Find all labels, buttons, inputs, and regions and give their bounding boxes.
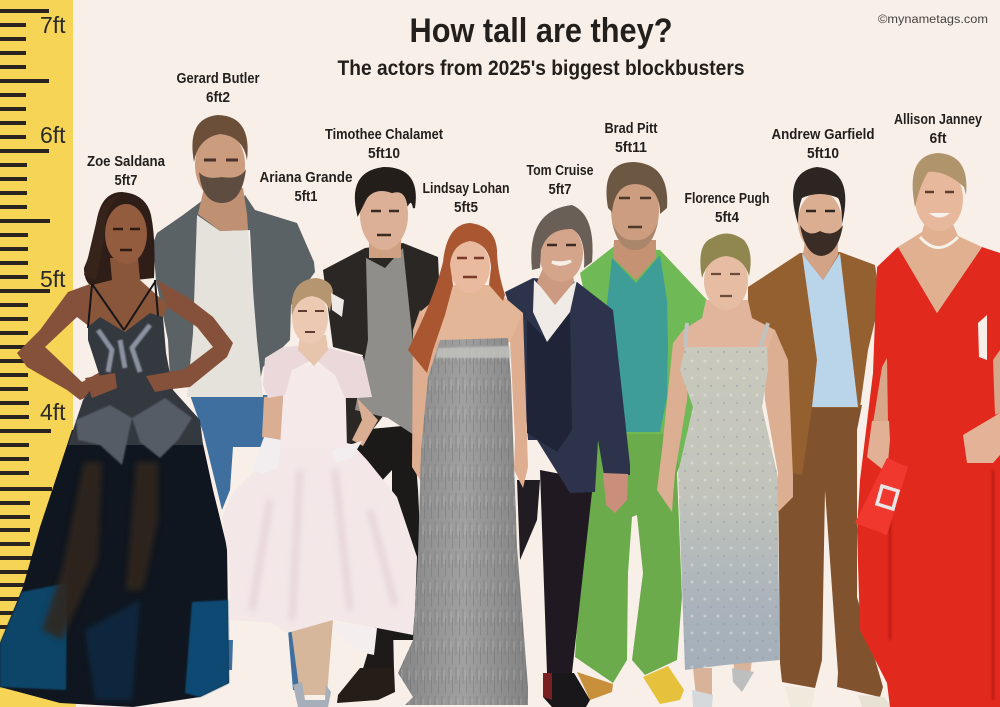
height ruler: 4ft: [40, 399, 66, 425]
brown trousers: [778, 405, 883, 697]
black jacket: [323, 243, 440, 446]
front hair: [84, 196, 120, 280]
arms: [262, 395, 378, 446]
blue hem right: [185, 600, 229, 697]
height ruler: 5ft: [40, 266, 66, 292]
labels: names and heights: 5ft10: [807, 146, 839, 162]
sheer legs: [42, 462, 158, 640]
labels: names and heights: [87, 71, 982, 226]
height ruler: 6ft: [40, 122, 66, 148]
grey shirt: [355, 248, 416, 435]
credit: mynametags.com: ©mynametags.com: [878, 14, 988, 26]
face: [704, 252, 748, 310]
navy jacket: [505, 278, 630, 493]
hands: [85, 372, 176, 398]
gown seams: [890, 470, 993, 700]
right shoe: [732, 668, 754, 692]
hair: [913, 153, 966, 207]
right arm: [145, 280, 233, 390]
legs: [693, 660, 752, 696]
labels: names and heights: Zoe Saldana: [87, 154, 166, 170]
bodice: [68, 313, 203, 445]
bodice: [280, 365, 347, 448]
left arm: [873, 358, 888, 423]
hair: [292, 278, 333, 316]
eyes and smile: [925, 191, 954, 193]
hair bow: [331, 293, 344, 317]
straps: [88, 280, 158, 330]
curly hair: [356, 168, 415, 214]
person: Brad Pitt: [575, 162, 708, 704]
labels: names and heights: 5ft7: [114, 173, 138, 189]
labels: names and heights: Allison Janney: [894, 112, 982, 128]
subtitle: The actors from 2025's biggest blockbusters: [338, 57, 744, 80]
beard: [800, 225, 843, 256]
bodice sequins: [98, 325, 150, 372]
person: Florence Pugh: [657, 233, 793, 707]
hair: [408, 223, 505, 373]
puff sleeves: [263, 346, 372, 398]
left shoe: [785, 686, 815, 707]
neck: [298, 335, 328, 366]
labels: names and heights: 5ft5: [454, 200, 478, 216]
trousers: [540, 470, 592, 673]
eyes and mouth: [711, 274, 740, 296]
blue hem centre: [85, 600, 140, 700]
top band highlight: [436, 346, 511, 358]
labels: names and heights: Andrew Garfield: [772, 127, 874, 143]
labels: names and heights: Gerard Butler: [176, 71, 260, 87]
right shoe: [858, 695, 892, 707]
left hand: [867, 421, 890, 473]
eyes and smile: [547, 244, 576, 246]
blue hem left: [0, 583, 67, 690]
sequin dress: [678, 347, 780, 670]
sequin texture: [678, 347, 780, 670]
decollete: [898, 222, 982, 313]
labels: names and heights: Brad Pitt: [604, 121, 658, 137]
face: [611, 170, 659, 250]
light blue shirt: [802, 253, 858, 407]
face: [360, 180, 408, 250]
labels: names and heights: 5ft7: [548, 182, 572, 198]
t-shirt: [187, 215, 263, 397]
legs: [290, 620, 333, 695]
green blazer: [580, 247, 708, 478]
face: [292, 292, 328, 344]
person: Tom Cruise: [505, 205, 630, 707]
height ruler: [0, 0, 76, 707]
back leg: [517, 480, 540, 560]
waistcoat: [527, 310, 572, 452]
red clutch: [855, 458, 908, 535]
right hand: [963, 413, 1000, 463]
brows and moustache: [371, 211, 399, 235]
labels: names and heights: 6ft2: [206, 90, 230, 106]
red gown: [857, 247, 1000, 707]
jeans below skirt: [226, 630, 300, 690]
stubble: [612, 222, 658, 250]
left arm: [657, 330, 690, 512]
person: Allison Janney: [855, 153, 1000, 707]
person: Lindsay Lohan: [398, 223, 528, 705]
hair: [793, 167, 845, 224]
shoes: [543, 673, 590, 707]
person: Zoe Saldana: [0, 192, 233, 707]
jeans: [190, 395, 283, 510]
red sole: [543, 673, 552, 700]
white shirt: [533, 280, 577, 342]
leather jacket: [153, 195, 315, 390]
skirt embroidery: [76, 398, 192, 465]
hair: [192, 115, 248, 162]
arms: [412, 310, 528, 488]
straps: [685, 323, 768, 347]
necklace: [920, 237, 958, 248]
labels: names and heights: Timothee Chalamet: [325, 127, 443, 143]
teal shirt: [597, 255, 668, 432]
person: Andrew Garfield: [748, 167, 892, 707]
neck: [613, 240, 656, 280]
eyes and mouth: [457, 258, 484, 277]
clutch buckle: [877, 486, 898, 509]
labels: names and heights: Ariana Grande: [260, 170, 352, 186]
labels: names and heights: 6ft: [930, 131, 947, 147]
face: [450, 241, 490, 293]
trousers: [345, 425, 421, 640]
left trainer: [577, 672, 613, 700]
shoulders and chest: [420, 285, 523, 342]
title: How tall are they?: [410, 12, 672, 50]
neck: [537, 268, 574, 305]
left arm: [17, 284, 115, 400]
height ruler: 7ft: [40, 12, 66, 38]
labels: names and heights: 5ft4: [715, 210, 739, 226]
hair: [700, 233, 751, 278]
labels: names and heights: 5ft10: [368, 146, 400, 162]
face: [539, 224, 583, 282]
labels: names and heights: 5ft11: [615, 140, 647, 156]
shoulders: [683, 300, 775, 350]
person: Timothee Chalamet: [323, 168, 440, 703]
hand: [603, 473, 628, 513]
gloves: [252, 437, 362, 474]
beard: [199, 169, 246, 203]
eyes: [806, 210, 835, 212]
labels: names and heights: 5ft1: [294, 189, 318, 205]
eyes: [204, 158, 238, 162]
green trousers: [575, 430, 682, 683]
person: Ariana Grande: [222, 278, 417, 707]
brown jacket: [748, 252, 880, 475]
eyes: [619, 198, 651, 227]
right forearm: [993, 350, 1000, 415]
hair: [606, 162, 667, 214]
face: [105, 204, 147, 264]
neck: [803, 240, 838, 280]
fringe texture: [398, 338, 528, 705]
person: Gerard Butler: [153, 115, 315, 690]
hair: [531, 205, 593, 270]
silver shoes: [293, 682, 331, 707]
boot: [337, 668, 395, 703]
sleeve slit: [978, 315, 987, 360]
skirt: [222, 445, 417, 635]
neck: [198, 188, 248, 231]
labels: names and heights: Tom Cruise: [526, 163, 594, 179]
gown skirt: [0, 430, 229, 707]
boot shaft: [362, 625, 394, 672]
eyes and mouth: [298, 311, 324, 332]
skirt underlayer: [232, 618, 377, 655]
face: [915, 167, 963, 231]
right trainer: [643, 666, 684, 704]
hair: [84, 192, 155, 285]
face: [195, 130, 245, 200]
skirt shading: [252, 470, 395, 620]
eyes and mouth: [113, 229, 140, 250]
neck: [369, 234, 401, 258]
fringed silver gown: [398, 338, 528, 705]
labels: names and heights: Florence Pugh: [684, 191, 770, 207]
face: [798, 192, 842, 252]
neck and chest: [88, 258, 168, 332]
left shoe: [692, 690, 713, 707]
right arm: [762, 330, 793, 513]
labels: names and heights: Lindsay Lohan: [422, 181, 510, 197]
